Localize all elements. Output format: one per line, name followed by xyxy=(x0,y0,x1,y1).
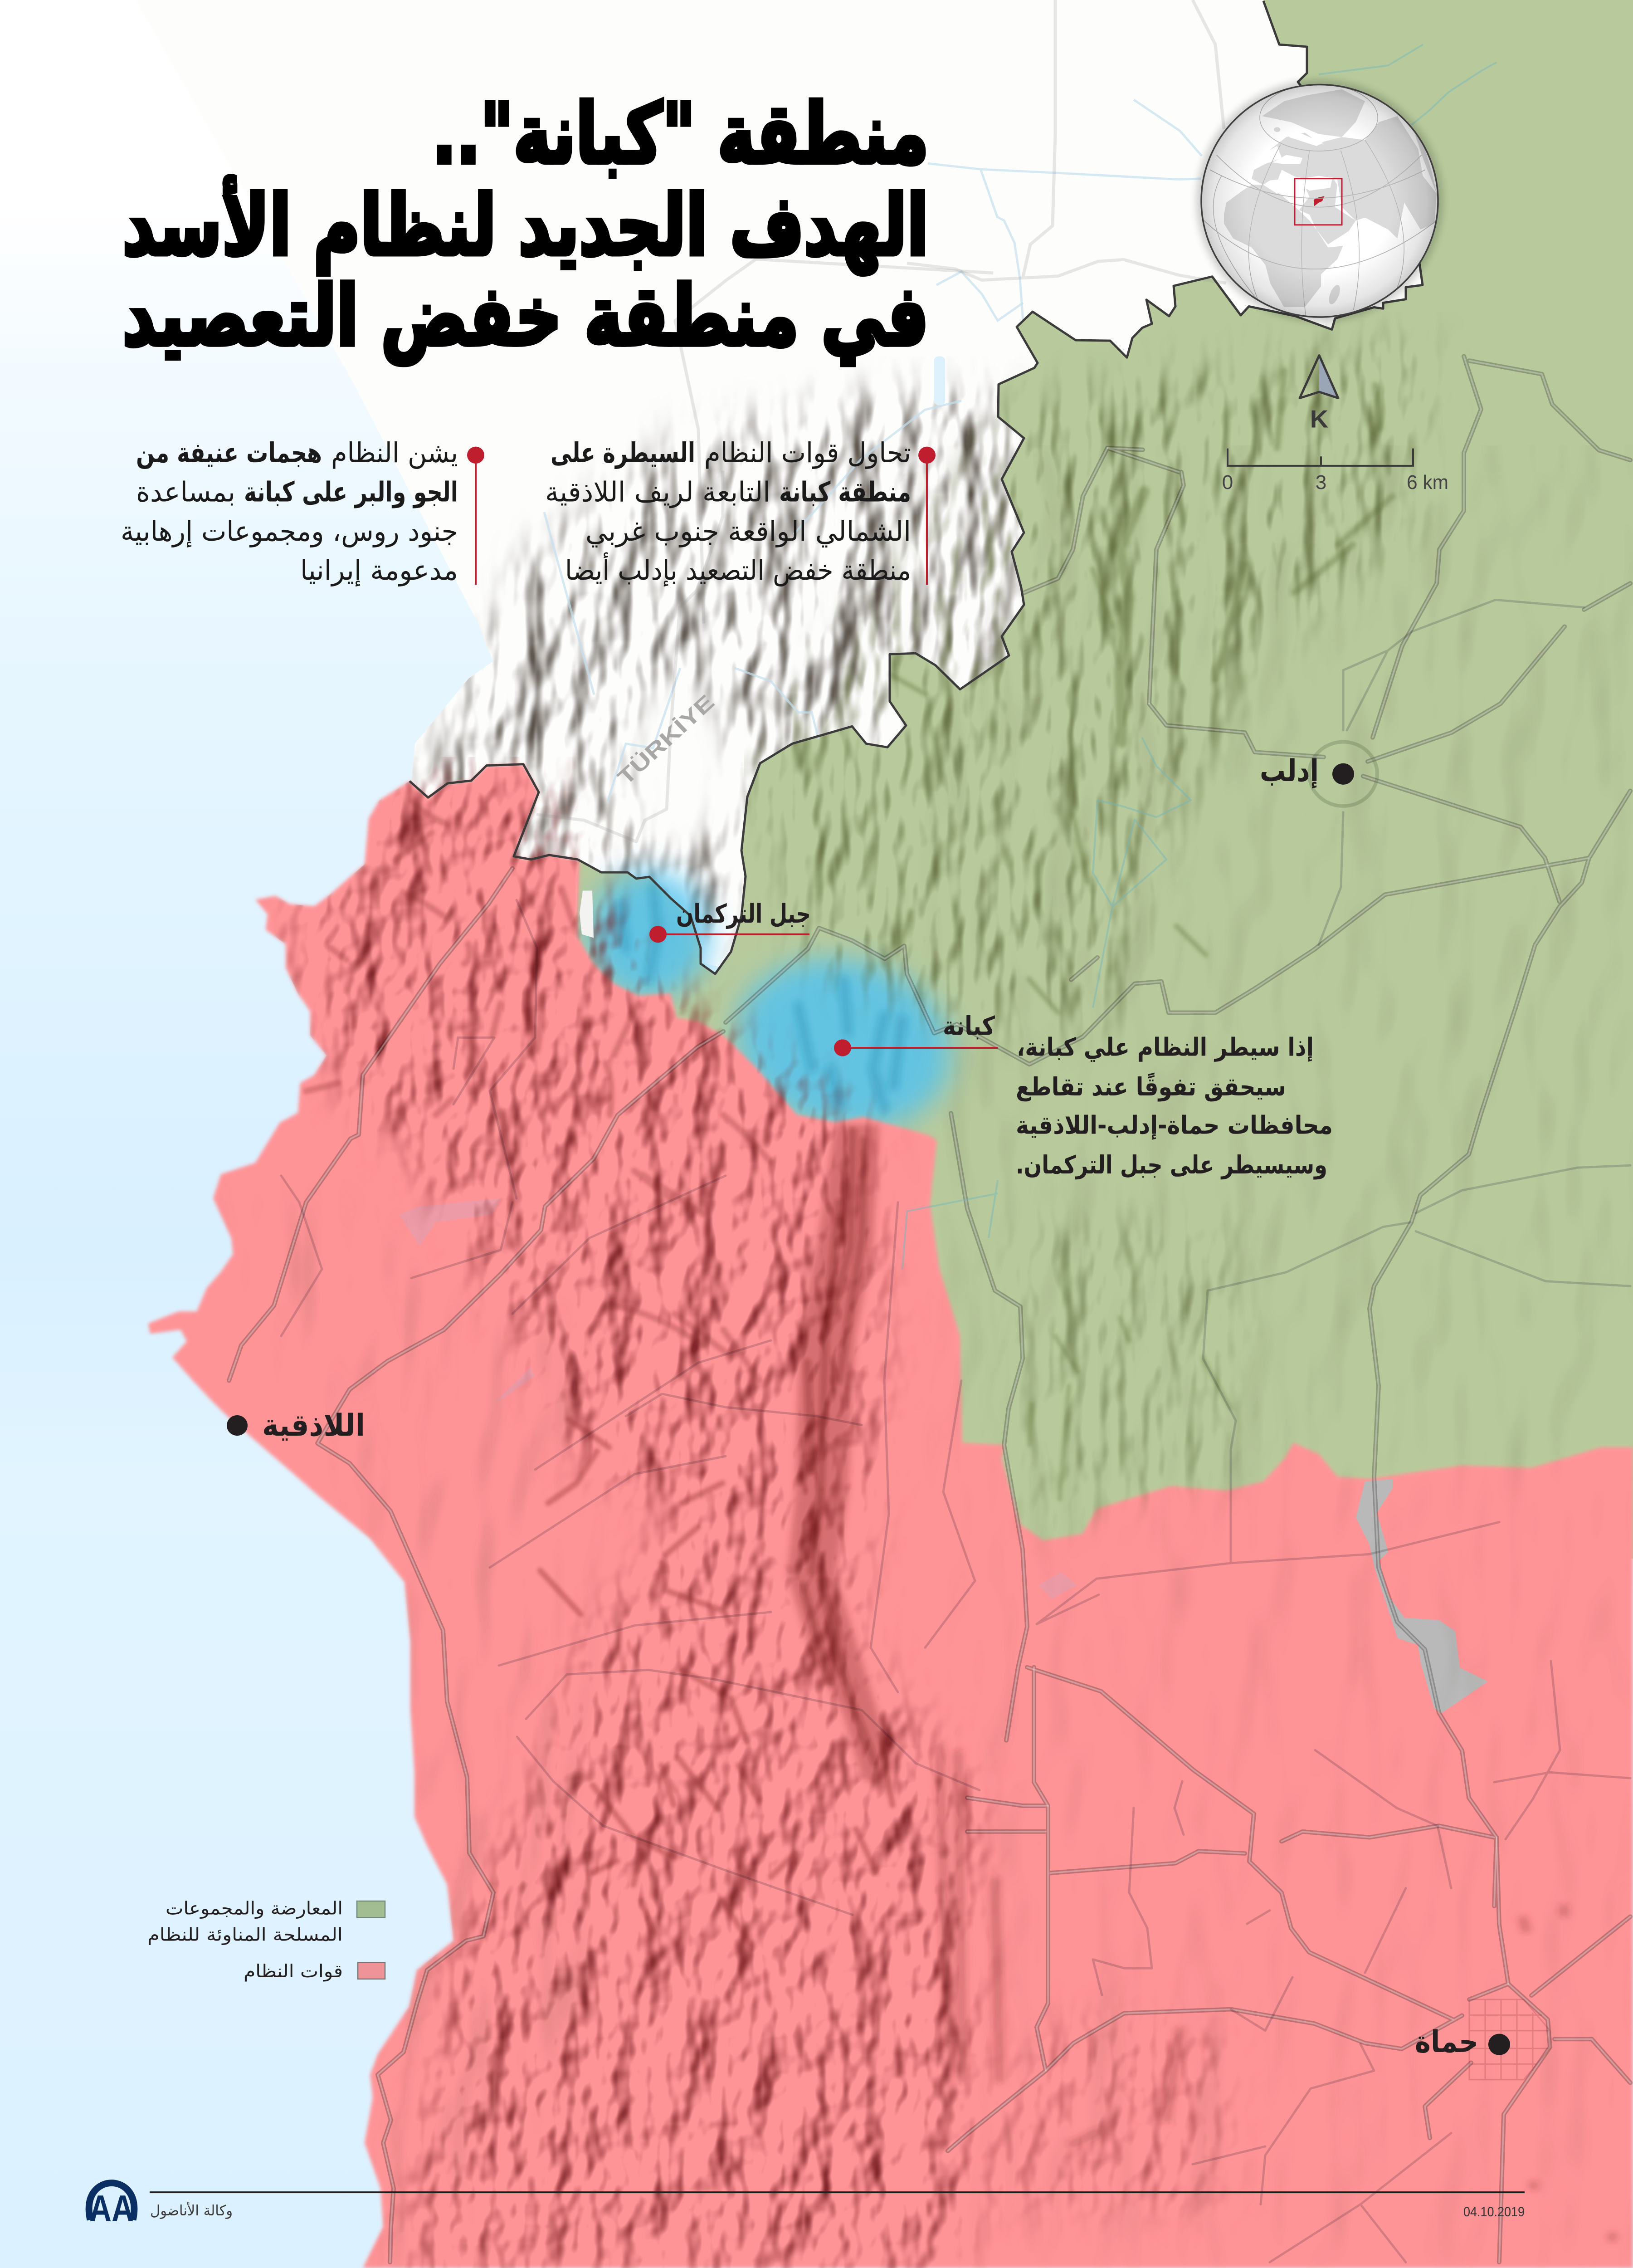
title: في منطقة خفض التعصيد xyxy=(122,268,929,365)
text block: right column: تحاول قوات النظام xyxy=(704,437,911,469)
place: Latakia: اللاذقية xyxy=(262,1408,365,1443)
scale bar: 6 km xyxy=(1407,472,1448,494)
country label: Türkiye: TÜRKİYE xyxy=(613,690,719,790)
scale bar xyxy=(1222,449,1448,494)
place: Idlib: إدلب xyxy=(1260,753,1319,789)
map: regime-held area xyxy=(148,764,1633,2268)
scale bar: 0 xyxy=(1222,472,1233,494)
place: Hama: حماة xyxy=(1415,2024,1478,2059)
green ridges xyxy=(891,371,1393,1013)
map: opposition-held area xyxy=(576,0,1633,1559)
legend xyxy=(147,1898,385,1982)
logo: Anadolu Agency: AA xyxy=(89,2188,134,2229)
title: منطقة "كبانة".. xyxy=(432,86,929,182)
globe locator xyxy=(1196,80,1443,322)
text block: left column: جنود روس، ومجموعات إرهابية xyxy=(121,515,458,548)
text block: right column: الشمالي الواقعة جنوب غربي xyxy=(585,515,911,547)
north arrow xyxy=(1300,355,1338,433)
scale bar: 3 xyxy=(1316,472,1326,494)
north arrow: K xyxy=(1310,405,1328,433)
text block: Kabbana explanation: إذا سيطر النظام علي كبانة، xyxy=(1017,1033,1314,1062)
date: 04.10.2019 xyxy=(1463,2204,1525,2219)
Idlib ring road xyxy=(1309,742,1377,806)
text block: Kabbana explanation: سيحقق تفوقًا عند تقاطع xyxy=(1016,1072,1286,1102)
text block: right column: منطقة خفض التصعيد بإدلب أيضا xyxy=(565,552,911,587)
text block: right column: السيطرة على xyxy=(551,437,695,469)
place: Latakia xyxy=(227,1408,365,1443)
text block: left column: يشن النظام xyxy=(331,437,458,469)
locator box xyxy=(1295,179,1342,225)
Lake in Turkey xyxy=(934,356,945,405)
text block: right column: منطقة كبانة xyxy=(779,476,911,508)
callout: Jabal al-Turkman: جبل التركمان xyxy=(676,899,811,929)
callout: Jabal al-Turkman xyxy=(649,899,811,943)
text block: left column: مدعومة إيرانيا xyxy=(300,555,458,587)
text block: right column: التابعة لريف اللاذقية xyxy=(545,476,770,508)
callout: Kabbana: كبانة xyxy=(943,1011,995,1041)
bullet marker right xyxy=(918,447,936,585)
legend: قوات النظام xyxy=(244,1961,343,1982)
text block: left column: بمساعدة xyxy=(136,476,235,508)
main ridges xyxy=(306,801,1615,2241)
legend: المعارضة والمجموعات xyxy=(166,1898,343,1919)
international border xyxy=(409,1,1423,974)
highlight: Jabal al-Turkman zone xyxy=(587,870,710,1000)
title xyxy=(122,86,929,365)
highlight: Kabbana zone xyxy=(716,935,971,1154)
terrain relief xyxy=(181,312,1633,2268)
text block: right column xyxy=(545,437,936,587)
footer rule xyxy=(150,2191,1525,2193)
text block: Kabbana explanation: محافظات حماة-إدلب-اللاذقية xyxy=(1016,1111,1333,1140)
text block: Kabbana explanation xyxy=(1016,1033,1333,1180)
blue zone shading xyxy=(621,886,902,1109)
map: lakes xyxy=(399,1198,1077,1598)
map: reservoir near Hama xyxy=(1356,1479,1488,1713)
text block: Kabbana explanation: وسيسيطر على جبل التركمان. xyxy=(1016,1150,1327,1180)
text block: left column xyxy=(121,437,484,587)
agency name: وكالة الأناضول xyxy=(150,2201,233,2219)
legend: المسلحة المناوئة للنظام xyxy=(147,1925,343,1945)
white strip in Jabal al-Turkman xyxy=(580,890,594,938)
map: Turkey relief xyxy=(412,366,1023,957)
callout: Kabbana xyxy=(834,1011,998,1056)
bullet marker left xyxy=(467,447,484,585)
title: الهدف الجديد لنظام الأسد xyxy=(122,176,929,275)
map: Turkey land xyxy=(136,0,1451,980)
text block: left column: الجو والبر على كبانة xyxy=(244,476,458,508)
Hama city xyxy=(1469,1999,1550,2080)
text block: left column: هجمات عنيفة من xyxy=(136,437,322,469)
